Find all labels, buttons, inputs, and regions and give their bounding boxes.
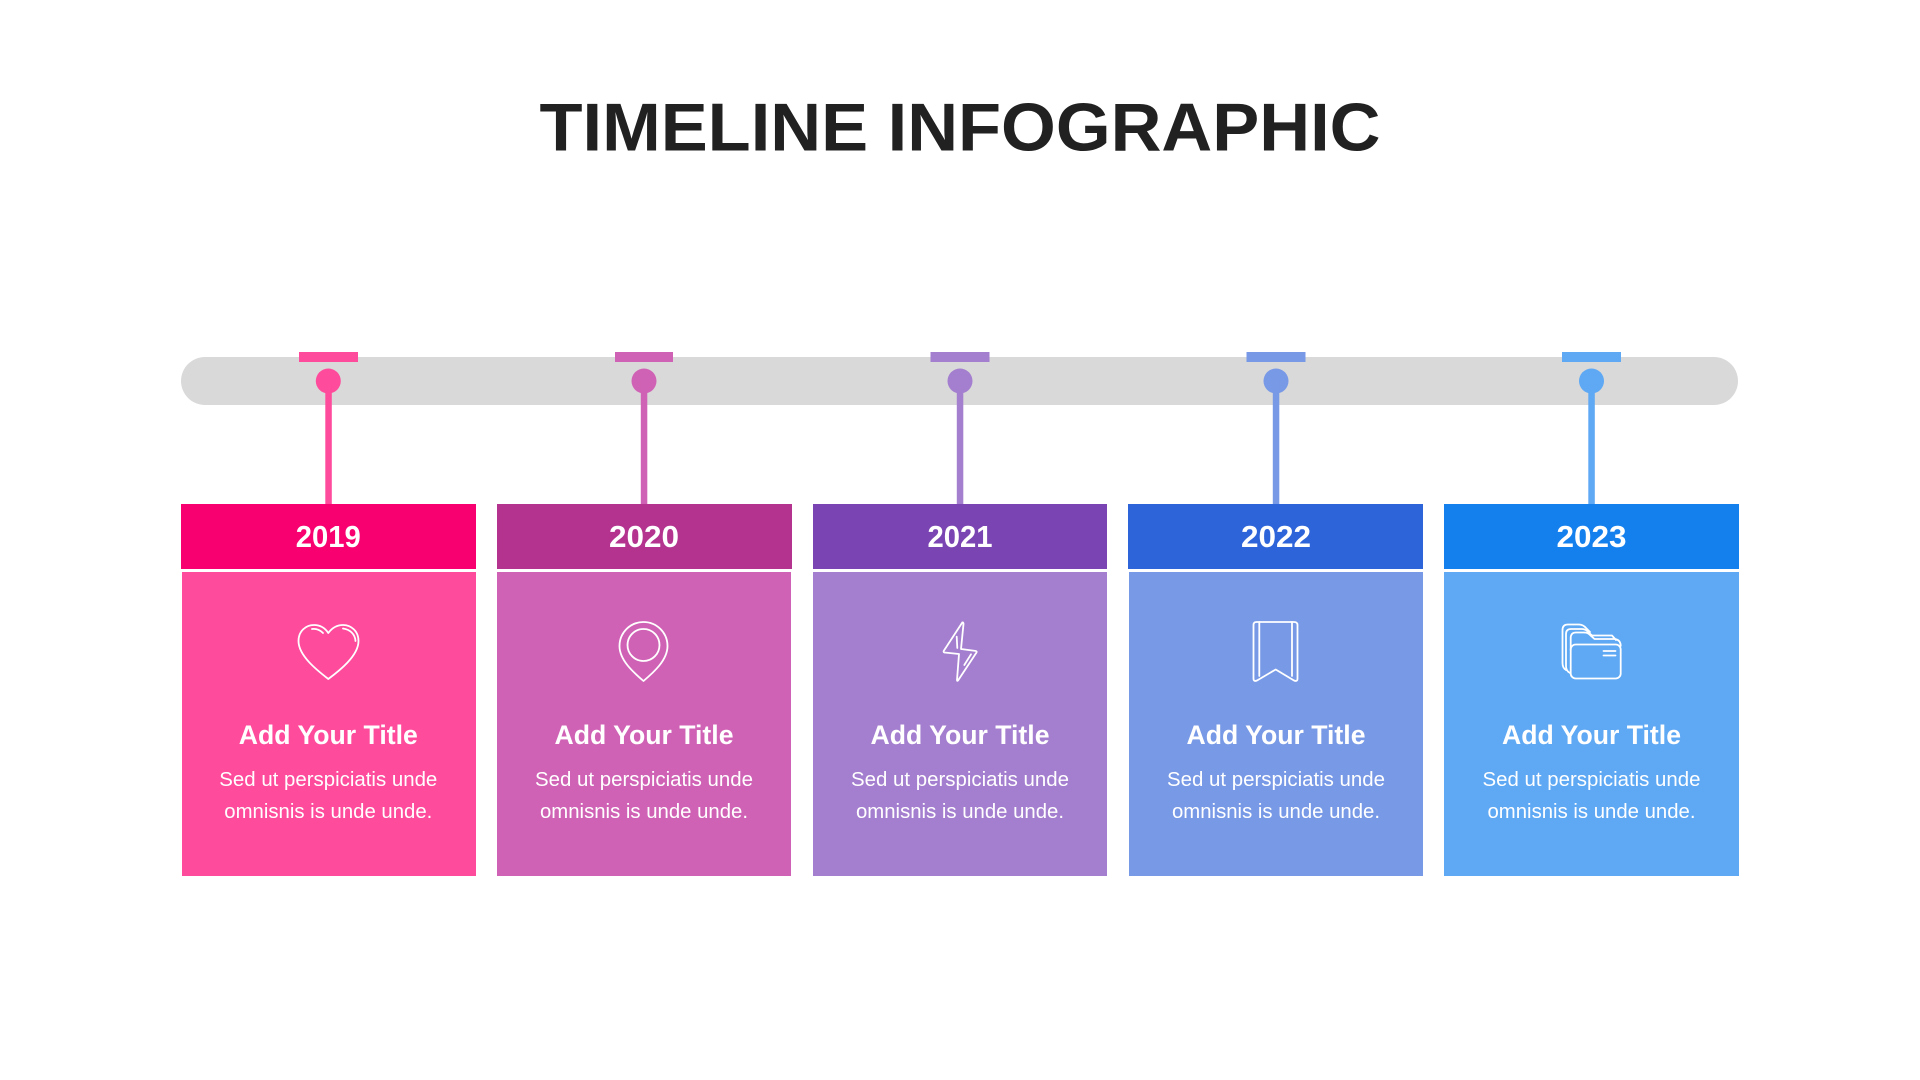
icon: folders bbox=[1562, 624, 1621, 678]
milestone 2019 bbox=[299, 352, 358, 504]
year header 2020: 2020 bbox=[609, 519, 679, 554]
icon: bookmark bbox=[1254, 622, 1298, 681]
card text 2020 bbox=[535, 769, 753, 823]
card text 2019: Sed ut perspiciatis unde bbox=[219, 769, 437, 791]
card text 2019: omnisnis is unde unde. bbox=[224, 801, 432, 823]
card text 2020: omnisnis is unde unde. bbox=[540, 801, 748, 823]
card body 2023 bbox=[1444, 572, 1739, 876]
milestone 2023 bbox=[1562, 352, 1621, 504]
year header 2023 bbox=[1444, 504, 1739, 569]
card text 2022: omnisnis is unde unde. bbox=[1172, 801, 1380, 823]
card title 2020: Add Your Title bbox=[554, 720, 734, 750]
card text 2023: Sed ut perspiciatis unde bbox=[1482, 769, 1700, 791]
year header 2020 bbox=[497, 504, 792, 569]
card text 2023: omnisnis is unde unde. bbox=[1488, 801, 1696, 823]
card text 2020: Sed ut perspiciatis unde bbox=[535, 769, 753, 791]
milestone 2022 bbox=[1246, 352, 1306, 504]
timeline track bbox=[181, 357, 1738, 405]
panel: 2019 bbox=[181, 504, 476, 876]
card body 2021 bbox=[813, 572, 1107, 876]
year header 2019 bbox=[181, 504, 476, 569]
panel: 2021 bbox=[813, 504, 1107, 876]
card text 2021 bbox=[851, 769, 1069, 823]
panel: 2023 bbox=[1444, 504, 1739, 876]
card body 2020 bbox=[497, 572, 791, 876]
icon: heart bbox=[298, 625, 358, 679]
panel: 2020 bbox=[497, 504, 792, 876]
card text 2022 bbox=[1167, 769, 1385, 823]
panel: 2022 bbox=[1128, 504, 1423, 876]
card body 2022 bbox=[1129, 572, 1423, 876]
card text 2021: omnisnis is unde unde. bbox=[856, 801, 1064, 823]
card text 2019 bbox=[219, 769, 437, 823]
year header 2022: 2022 bbox=[1241, 519, 1311, 554]
milestone 2020 bbox=[615, 352, 673, 504]
card title 2022: Add Your Title bbox=[1186, 720, 1366, 750]
icon: location pin bbox=[620, 622, 668, 681]
card text 2021: Sed ut perspiciatis unde bbox=[851, 769, 1069, 791]
card body 2019 bbox=[182, 572, 476, 876]
year header 2019: 2019 bbox=[296, 519, 361, 554]
card text 2022: Sed ut perspiciatis unde bbox=[1167, 769, 1385, 791]
year header 2021 bbox=[813, 504, 1107, 569]
card text 2023 bbox=[1482, 769, 1700, 823]
year header 2022 bbox=[1128, 504, 1423, 569]
card title 2021: Add Your Title bbox=[870, 720, 1050, 750]
icon: lightning bolt bbox=[944, 622, 977, 681]
year header 2021: 2021 bbox=[928, 519, 992, 554]
year header 2023: 2023 bbox=[1556, 519, 1626, 554]
title: TIMELINE INFOGRAPHIC bbox=[540, 90, 1380, 166]
card title 2019: Add Your Title bbox=[239, 720, 418, 750]
card title 2023: Add Your Title bbox=[1502, 720, 1681, 750]
milestone 2021 bbox=[930, 352, 990, 504]
